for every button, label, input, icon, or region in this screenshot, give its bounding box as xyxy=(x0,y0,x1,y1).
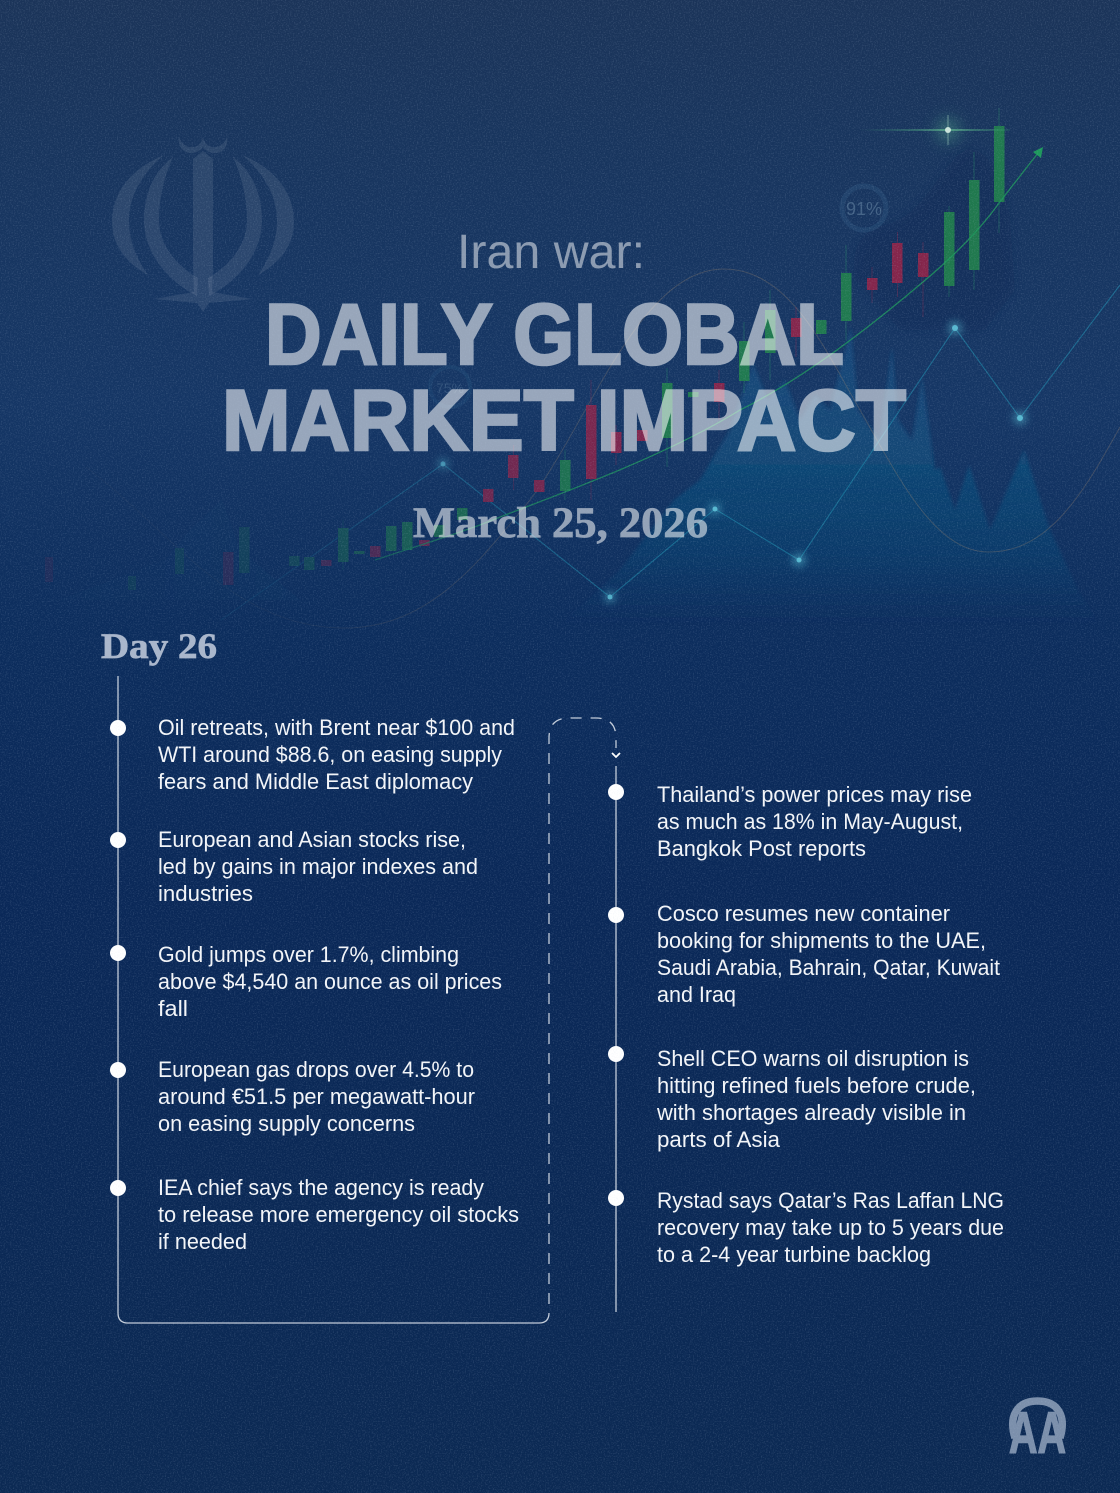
title: Daily Global Market Impact: DAILY GLOBAL xyxy=(265,287,844,383)
gauge: 91% xyxy=(842,186,886,230)
heading: Day 26: Day 26 xyxy=(101,626,217,666)
item: Thailand xyxy=(657,782,972,861)
item: IEA xyxy=(158,1175,519,1254)
item: Cosco: Cosco resumes new container xyxy=(657,901,950,926)
item: Shell: hitting refined fuels before crude, xyxy=(657,1073,976,1098)
chart: teal area mountains xyxy=(631,332,1063,566)
item: oil: WTI around $88.6, on easing supply xyxy=(158,742,502,767)
item: gold xyxy=(158,942,502,1021)
chart: green trend arrow xyxy=(375,147,1043,560)
item: stocks: led by gains in major indexes and xyxy=(158,854,478,879)
gauge: 75% xyxy=(430,367,470,407)
item: Thailand: Thailand’s power prices may rise xyxy=(657,782,972,807)
title: Daily Global Market Impact xyxy=(222,287,906,469)
chart: green candles xyxy=(128,126,1004,590)
timeline dots xyxy=(110,720,624,1206)
item: gold: Gold jumps over 1.7%, climbing xyxy=(158,942,459,967)
item: gas: on easing supply concerns xyxy=(158,1111,415,1136)
item: Rystad xyxy=(657,1188,1004,1267)
timeline connector xyxy=(118,676,620,1323)
chart: green star glow xyxy=(860,115,1010,145)
chart: glowing nodes xyxy=(437,321,1027,603)
item: Rystad: recovery may take up to 5 years due xyxy=(657,1215,1004,1240)
item: Shell: parts of Asia xyxy=(657,1127,781,1152)
item: oil xyxy=(158,715,515,794)
title: Iran war: Iran war: xyxy=(457,226,645,279)
item: stocks: industries xyxy=(158,881,253,906)
item: IEA: to release more emergency oil stocks xyxy=(158,1202,519,1227)
item: Cosco: Saudi Arabia, Bahrain, Qatar, Kuwait xyxy=(657,955,1000,980)
item: stocks: European and Asian stocks rise, xyxy=(158,827,466,852)
item: oil: Oil retreats, with Brent near $100 and xyxy=(158,715,515,740)
chart: teal zigzag line xyxy=(221,285,1120,620)
dark rocket silhouette behind chart xyxy=(854,149,1015,330)
date: March 25, 2026 xyxy=(413,500,708,547)
logo: Anadolu Agency: AA xyxy=(1009,1401,1066,1466)
item: Shell: Shell CEO warns oil disruption is xyxy=(657,1046,969,1071)
market chart illustration xyxy=(0,108,1120,628)
item: stocks xyxy=(158,827,478,906)
left column text xyxy=(158,715,519,1254)
item: gas xyxy=(158,1057,475,1136)
item: Cosco: and Iraq xyxy=(657,982,736,1007)
icon: Iran emblem watermark xyxy=(112,136,294,312)
item: Shell: with shortages already visible in xyxy=(656,1100,966,1125)
item: gold: above $4,540 an ounce as oil prices xyxy=(158,969,502,994)
right column text xyxy=(656,782,1004,1267)
item: Rystad: Rystad says Qatar’s Ras Laffan LNG xyxy=(657,1188,1004,1213)
chart: candlestick wicks xyxy=(343,108,999,570)
chart: sine curve xyxy=(86,269,1120,628)
item: Cosco xyxy=(657,901,1000,1007)
item: IEA: IEA chief says the agency is ready xyxy=(158,1175,484,1200)
item: Rystad: to a 2-4 year turbine backlog xyxy=(657,1242,931,1267)
title: Daily Global Market Impact: MARKET IMPACT xyxy=(222,373,906,469)
item: Cosco: booking for shipments to the UAE, xyxy=(657,928,986,953)
logo: Anadolu Agency xyxy=(1009,1401,1066,1466)
item: IEA: if needed xyxy=(158,1229,247,1254)
item: oil: fears and Middle East diplomacy xyxy=(158,769,473,794)
item: Thailand: Bangkok Post reports xyxy=(657,836,866,861)
chart: red candles xyxy=(45,243,928,585)
item: gas: around €51.5 per megawatt-hour xyxy=(158,1084,475,1109)
gauge: 91%: 91% xyxy=(846,199,882,219)
item: Shell xyxy=(656,1046,976,1152)
item: Thailand: as much as 18% in May-August, xyxy=(657,809,963,834)
gauge: left edge xyxy=(0,502,10,522)
item: gold: fall xyxy=(158,996,188,1021)
gauge: 75%: 75% xyxy=(436,380,464,396)
item: gas: European gas drops over 4.5% to xyxy=(158,1057,474,1082)
